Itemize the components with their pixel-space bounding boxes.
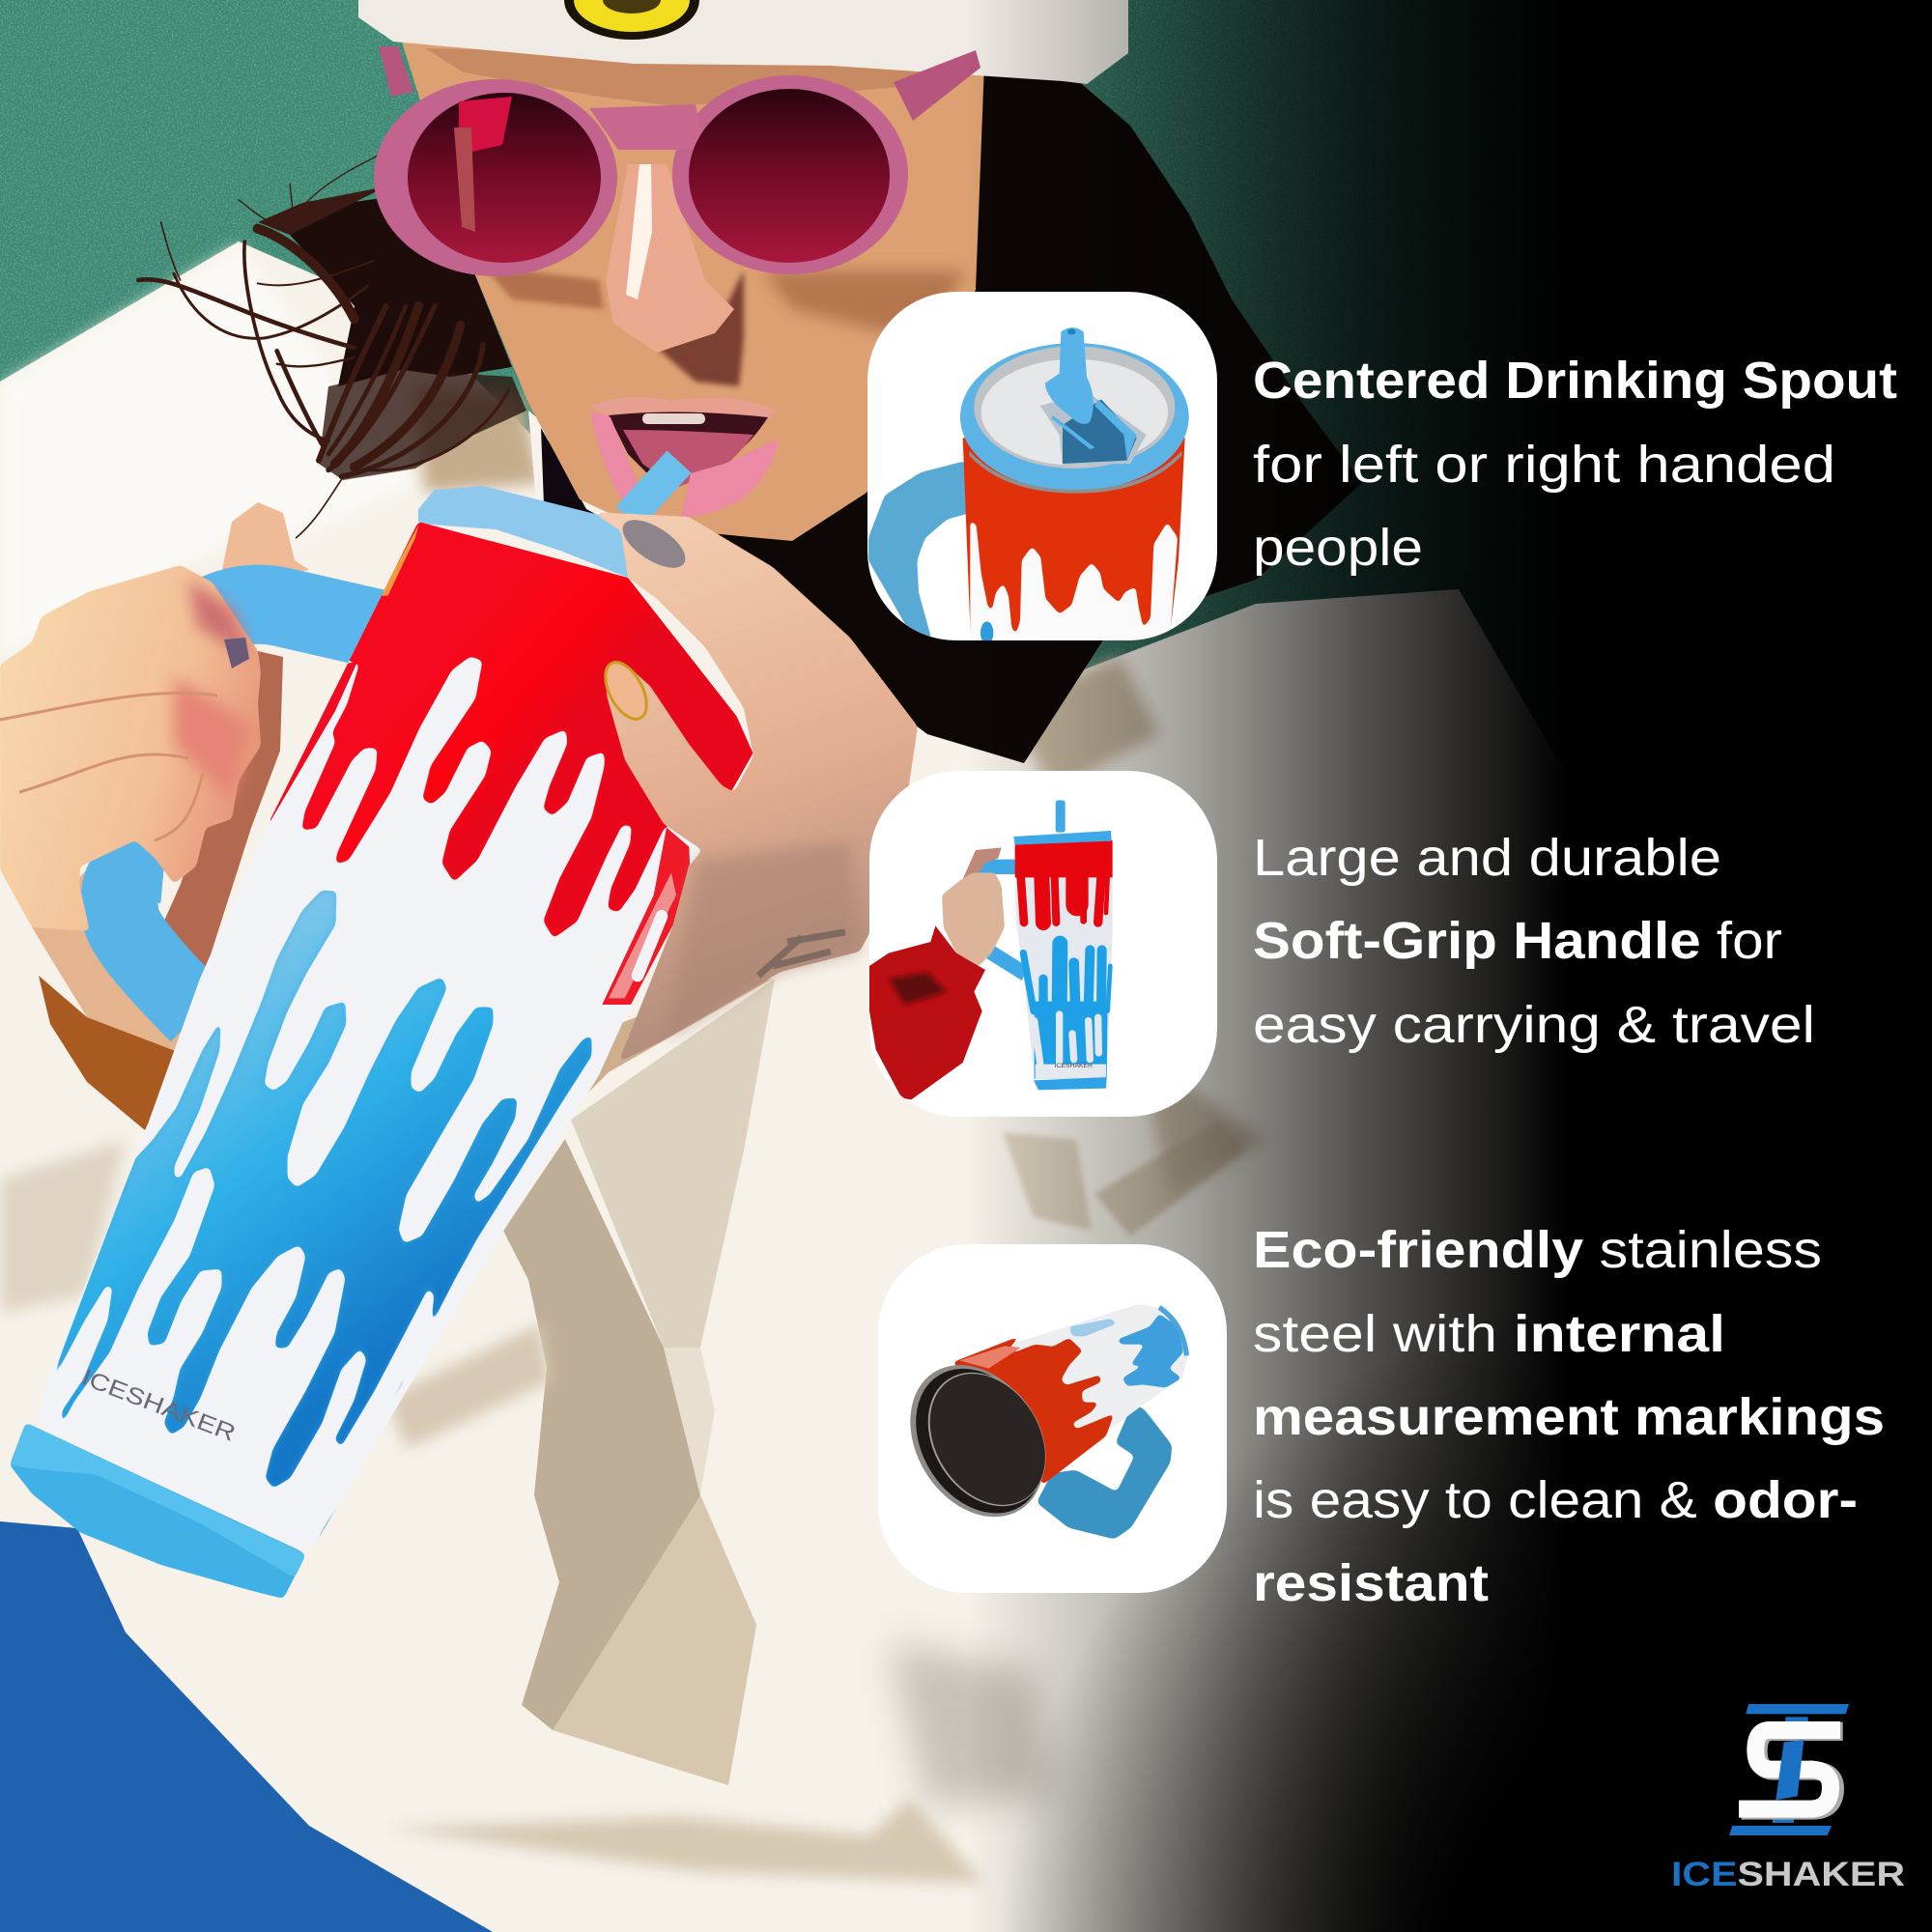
sleeve [869,925,985,1099]
green court background [0,0,1642,869]
tumbler logo: ICESHAKER [78,1364,239,1447]
text: eco-friendly stainless steel: resistant [1253,1554,1489,1612]
text: soft-grip handle [1253,829,1815,1054]
text: centered drinking spout [1253,352,1897,577]
red paint [953,1336,1114,1485]
hair left [138,152,526,538]
mug body [953,1305,1187,1481]
neck shadow behind hair [415,386,541,493]
red paint [1015,840,1113,923]
text: soft-grip handle: Large and durable [1253,829,1721,887]
logo: iceshaker [1671,1704,1905,1893]
thumb left hand [222,502,309,580]
face [401,39,985,541]
text: soft-grip handle: easy carrying & travel [1253,996,1815,1054]
hand [942,872,1005,966]
straw [1056,800,1065,833]
left lens reflection [459,97,512,155]
nose [606,164,734,353]
glitter nail [615,511,693,577]
left hand [0,565,261,931]
base [1034,1077,1107,1090]
lid [1013,831,1112,845]
fingertip [963,847,1002,879]
mug body [963,438,1185,644]
right hand [592,511,918,1063]
text: eco-friendly stainless steel: is easy to clean & odor- [1253,1471,1858,1529]
solid black column [1565,0,1932,1932]
opening rim [883,1340,1071,1542]
panel: soft-grip handle photo [869,771,1217,1117]
text: centered drinking spout: people [1253,519,1423,577]
collar [528,411,618,526]
logo wordmark: ICE SHAKER [1671,1856,1905,1893]
tumbler body [1015,840,1113,1079]
straw [628,462,679,518]
panel: centered spout photo [867,292,1217,644]
nose highlight [626,164,652,299]
straw spout [1045,327,1094,424]
cream sweater [0,242,1565,1932]
arm behind handle [161,651,283,970]
text: eco-friendly stainless steel [1253,1221,1885,1612]
wrist tattoo [758,932,845,976]
logo on mug: ICESHAKER [1055,1063,1093,1069]
shadow under glasses [483,266,604,309]
left lens [408,93,601,263]
silicone base [10,1423,306,1599]
text: centered drinking spout: for left or right handed [1253,436,1835,494]
text: eco-friendly stainless steel: measurement markings [1253,1388,1885,1446]
white drips [971,522,1177,644]
shadow beside nose [657,270,744,386]
smiley badge [564,0,699,40]
tumbler [10,462,758,1599]
interior lip [890,1345,1069,1537]
lower lip right [681,440,778,517]
tumbler handle [119,605,382,1014]
dark gradient overlay right [966,0,1932,1932]
text: soft-grip handle: Soft-Grip Handle for [1253,912,1782,970]
lower lip left [590,411,645,517]
sweater fold shadows [0,657,1265,1884]
text: eco-friendly stainless steel: Eco-friendly stainless [1253,1221,1822,1279]
blue paint [1023,944,1110,1079]
forehead light [425,48,966,106]
right lens [689,89,890,263]
upper lip [590,397,778,420]
handle [867,462,966,637]
red paint [270,520,753,1005]
wrist [32,869,193,1053]
hair right [676,48,1362,763]
dark corner overlay bottom right [869,1208,1932,1932]
blue paint [1069,1307,1186,1388]
tongue [623,430,753,488]
teeth [642,413,705,424]
clear lid [974,346,1175,469]
rim outer [960,343,1189,491]
beanie [358,0,1128,84]
handle [1038,1406,1171,1538]
rim shadow edge [969,451,1181,494]
tumbler body [36,522,758,1552]
hand shading [667,840,860,1038]
panel: stainless steel interior photo [878,1244,1227,1593]
handle [973,867,1017,874]
sunglasses [374,46,980,276]
lid [418,486,638,578]
gold nail [597,656,655,725]
mouth interior [609,412,768,483]
text: eco-friendly stainless steel: steel with internal [1253,1305,1725,1363]
blue paint [48,891,591,1546]
jeans [0,1521,493,1932]
sip mechanism [1040,393,1147,466]
blue hint [980,621,993,640]
sweater bright shoulder [0,246,415,657]
text: centered drinking spout: Centered Drinking Spout [1253,352,1897,410]
wrist shadow [39,976,181,1130]
logo mark [1729,1704,1849,1835]
interior wall [904,1350,1070,1528]
